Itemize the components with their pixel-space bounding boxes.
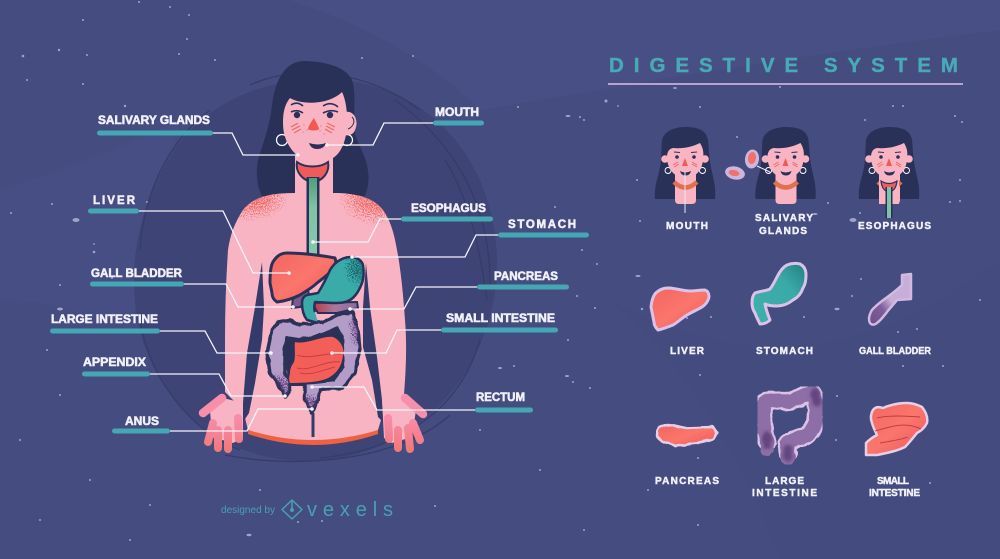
- label: liver: LIVER: [93, 195, 136, 207]
- shoulder stipple: [238, 193, 388, 226]
- watermark: vexels: vexels: [307, 499, 393, 521]
- figure: woman anatomy: [203, 61, 423, 449]
- caption: small intestine: SMALL: [877, 476, 909, 487]
- freckles: [291, 123, 335, 135]
- label: gall bladder: GALL BLADDER: [91, 268, 183, 280]
- label: large intestine: LARGE INTESTINE: [51, 314, 158, 326]
- ear: [345, 112, 357, 135]
- caption: mouth: MOUTH: [666, 221, 708, 232]
- icon: liver: [651, 288, 709, 330]
- torso shading slits: [243, 262, 264, 422]
- large intestine: [265, 310, 362, 415]
- label: mouth: MOUTH: [435, 107, 479, 119]
- label: pancreas: PANCREAS: [494, 271, 558, 283]
- label: esophagus: ESOPHAGUS: [411, 203, 486, 215]
- waistband: [248, 430, 378, 445]
- small intestine: [289, 337, 343, 383]
- label: rectum: RECTUM: [476, 392, 525, 404]
- label: anus: ANUS: [125, 416, 159, 428]
- left hand: [203, 398, 243, 449]
- label: salivary glands: SALIVARY GLANDS: [98, 115, 210, 127]
- caption: stomach: STOMACH: [756, 346, 813, 357]
- caption: large intestine: INTESTINE: [752, 488, 817, 499]
- nose: [308, 118, 319, 130]
- icon: large intestine: [763, 393, 817, 458]
- icon: vexels diamond: [282, 500, 302, 519]
- leg divide: [312, 413, 314, 437]
- leader lines: [139, 123, 498, 431]
- mouth: [309, 143, 326, 149]
- caption: pancreas: PANCREAS: [655, 476, 719, 487]
- body and arms: [225, 155, 406, 442]
- hair: [257, 61, 368, 196]
- icon: esophagus head: [859, 127, 919, 218]
- liver: [270, 253, 336, 302]
- caption: small intestine: INTESTINE: [869, 488, 920, 499]
- stomach: [300, 256, 365, 324]
- right hand: [382, 393, 423, 449]
- watermark: designed by: designed by: [221, 504, 276, 516]
- icon: small intestine: [866, 403, 927, 455]
- label: stomach: STOMACH: [508, 219, 576, 231]
- label: appendix: APPENDIX: [83, 357, 146, 369]
- throat: [297, 162, 328, 182]
- halo behind the figure: [134, 73, 497, 462]
- face: [283, 92, 347, 163]
- caption: esophagus: ESOPHAGUS: [858, 221, 931, 232]
- earrings: [276, 134, 352, 146]
- icon: stomach: [752, 263, 806, 324]
- label bars: [50, 120, 589, 434]
- eyes and brows: [291, 103, 338, 113]
- pancreas: [312, 302, 358, 313]
- icon: gall bladder: [869, 274, 911, 325]
- leader dots: [269, 143, 354, 411]
- icon: mouth head: [655, 127, 715, 213]
- caption: liver: LIVER: [670, 346, 705, 357]
- gall bladder: [292, 290, 310, 308]
- icon: pancreas: [657, 425, 717, 446]
- title underline: [608, 83, 963, 85]
- icon: salivary glands head: [724, 127, 816, 204]
- label: small intestine: SMALL INTESTINE: [446, 313, 555, 325]
- caption: large intestine: LARGE: [765, 476, 804, 487]
- title: DIGESTIVE SYSTEM: [609, 54, 958, 77]
- esophagus: [306, 177, 320, 261]
- caption: gall bladder: GALL BLADDER: [859, 346, 932, 357]
- caption: salivary glands: SALIVARY: [755, 213, 813, 224]
- caption: salivary glands: GLANDS: [759, 226, 807, 237]
